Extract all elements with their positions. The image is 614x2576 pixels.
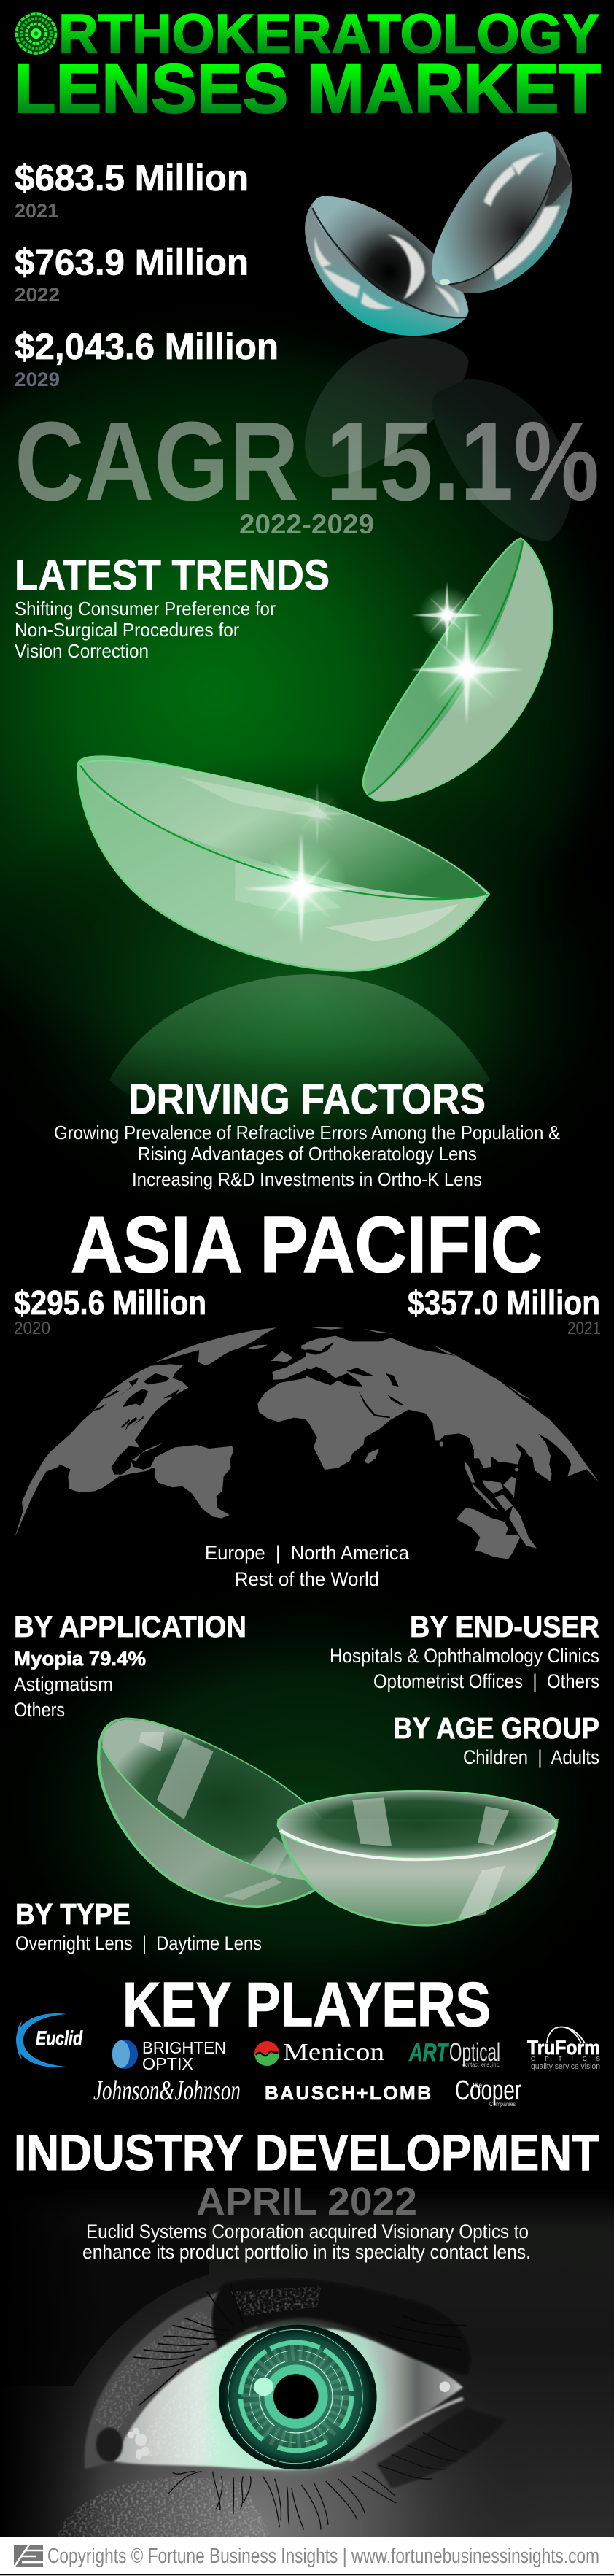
panel: by type: BY TYPE [15,1897,131,1931]
logo: Euclid: Euclid [36,2027,82,2049]
logo: Menicon [254,2039,384,2066]
panel: by type [15,1897,262,1954]
market value 2022: 2022 [15,284,60,306]
sclera mottling [136,2357,224,2461]
sclera [114,2329,463,2470]
panel: by type: Overnight Lens | Daytime Lens [15,1932,262,1954]
green contact lens: upper right [363,538,552,801]
lower lid rim [350,2399,463,2461]
right teal lens [432,132,572,293]
development description: enhance its product portfolio in its specialty contact lens. [82,2241,531,2263]
market value 2021: 2021 [15,200,58,222]
pupil [273,2374,318,2419]
panel: latest trends [15,552,330,662]
footer rule [0,2575,614,2576]
upper lash highlights [231,2286,321,2315]
development description: Euclid Systems Corporation acquired Visionary Optics to [86,2221,529,2243]
background glow: segment lenses [0,1569,614,2051]
other segments: Astigmatism [14,1673,113,1695]
development date: APRIL 2022 [196,2180,417,2224]
iris halo [213,2326,383,2468]
heading: latest trends: LATEST TRENDS [15,552,330,599]
logo: TruForm Optics: TruForm [527,2037,600,2059]
icon: Fortune Business Insights logo [14,2545,43,2567]
left teal lens [305,196,469,336]
title line 2: LENSES MARKET [14,50,601,128]
teal contact lenses [305,132,572,336]
background glow: green lens stage [0,296,614,1091]
upper lashes [133,2284,467,2406]
other regions: Rest of the World [235,1568,379,1590]
panel: by end-user: BY END-USER [410,1610,599,1643]
segment lenses [98,1719,557,1925]
lens sparkles [243,581,523,946]
logo: Brighten Optix [112,2038,226,2073]
logo: Johnson & Johnson: Johnson&Johnson [93,2075,241,2106]
driving factor list: Rising Advantages of Orthokeratology Lens [138,1143,477,1165]
lower cheek highlight texture [58,2477,272,2537]
background glow: driving factors [0,752,614,1248]
logo: Bausch + Lomb: BAUSCH+LOMB [265,2082,431,2104]
other segments: Others [14,1699,65,1721]
market value 2021 [15,158,249,222]
logo: Art Optical: contact lens, inc. [462,2062,500,2068]
corneal highlight [254,2378,273,2396]
market value 2029: 2029 [15,369,60,390]
logo: TruForm Optics: OPTICS [531,2056,600,2062]
driving factor list: Growing Prevalence of Refractive Errors Among the Population & [54,1122,560,1144]
logo: Menicon: Menicon [283,2039,384,2066]
map west: Americas [15,1327,307,1538]
market value 2029: $2,043.6 Million [15,326,279,367]
regional value 2021 [408,1284,601,1338]
upper-left dark corner [0,2189,209,2386]
inner corner shadow [96,2428,123,2461]
title line 1: RTHOKERATOLOGY [58,3,599,66]
market value 2022: $763.9 Million [15,242,249,283]
heading: BY APPLICATION [14,1610,246,1643]
world map globe [15,1327,599,1559]
other regions [205,1542,410,1590]
logo: Cooper Companies: The [472,2082,482,2090]
heading: driving factors: DRIVING FACTORS [128,1076,486,1123]
logo: Euclid [16,2013,82,2067]
footer [0,2537,614,2576]
contact lens rings [228,2329,362,2464]
market value 2021: $683.5 Million [15,158,249,198]
panel: by end-user [330,1610,599,1692]
panel: by age group [393,1711,599,1768]
logo: Cooper Companies: Companies [489,2101,516,2108]
lens reflection: large [109,974,490,1124]
other segments [14,1673,113,1721]
teal lens reflection [305,337,572,541]
trend description: Shifting Consumer Preference for [15,598,276,620]
market value 2022 [15,242,249,306]
regional value 2021: 2021 [567,1319,601,1338]
cheek skin [0,2260,614,2537]
logo: Art Optical: Optical [449,2038,500,2067]
logo: TruForm Optics [527,2027,600,2071]
regional value 2020 [14,1284,206,1338]
panel: by age group: Children | Adults [463,1746,599,1768]
eye photo [0,2189,614,2537]
heading: key players: KEY PLAYERS [123,1970,491,2040]
trend description: Non-Surgical Procedures for [15,619,239,641]
market value 2029 [15,326,279,390]
footer bar [0,2537,614,2574]
lower lashes [168,2432,467,2530]
panel: driving factors [54,1076,560,1190]
regional value 2020: 2020 [14,1319,50,1338]
left shadow [0,2189,102,2537]
panel: by application [14,1610,246,1721]
CAGR period: 2022-2029 [239,509,374,539]
trend description [15,598,276,662]
title [14,3,601,128]
eyelid skin texture [95,2311,224,2435]
eyelid skin [85,2286,257,2469]
driving factor list: Increasing R&D Investments in Ortho-K Lens [132,1168,482,1190]
regional value 2020: $295.6 Million [14,1284,206,1322]
icon: circuit iris letter O [15,12,57,55]
inner corner reflections [128,2381,450,2460]
right glass lens [278,1791,557,1925]
logo: Art Optical: ART [408,2039,449,2067]
dark lash band [212,2278,470,2375]
iris [219,2325,377,2469]
photo backdrop [0,2189,614,2537]
other regions: Europe | North America [205,1542,410,1564]
driving factor list [54,1122,560,1190]
logo: TruForm Optics: quality service vision [531,2062,600,2071]
logo: Cooper Companies: Cooper [455,2075,521,2106]
logo: Brighten Optix: OPTIX [142,2054,193,2073]
logo: Brighten Optix: BRIGHTEN [142,2038,226,2057]
map east: Eurasia, Africa, Oceania [306,1327,599,1559]
lower right lash skin [377,2408,505,2488]
development description [82,2221,531,2263]
trend description: Vision Correction [15,640,149,662]
logo: Art Optical [408,2038,500,2068]
leading segment: Myopia 79.4% [14,1648,146,1670]
heading: asia pacific: ASIA PACIFIC [71,1200,543,1289]
green contact lens: large [78,757,489,971]
left glass lens [98,1719,346,1907]
